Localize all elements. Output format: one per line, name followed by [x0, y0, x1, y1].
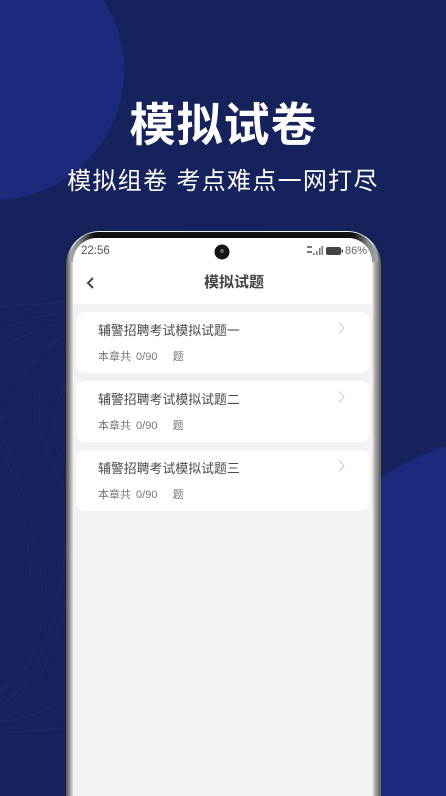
icon: status signal and battery: [307, 246, 343, 255]
icon: camera: [214, 244, 230, 260]
icon: back arrow: [86, 277, 94, 289]
card: test one: [76, 312, 370, 373]
status bar battery percent: 86%: [345, 245, 367, 257]
subtitle: 模拟组卷 考点难点一网打尽: [67, 168, 379, 195]
card: test two: 本章共 0/90 题: [98, 420, 184, 432]
card: test three: 本章共 0/90 题: [98, 489, 184, 501]
screen title: 模拟试题: [204, 274, 264, 291]
app header: [73, 238, 372, 304]
screen: [73, 238, 372, 796]
phone mockup: [66, 231, 381, 796]
card: test three: 辅警招聘考试模拟试题三: [98, 461, 240, 476]
card: test three: [76, 450, 370, 511]
status bar time: 22:56: [81, 245, 110, 257]
card: test two: 辅警招聘考试模拟试题二: [98, 392, 240, 407]
phone top bezel: [69, 232, 378, 262]
title: 模拟试卷: [130, 99, 318, 151]
card: test one: 辅警招聘考试模拟试题一: [98, 323, 240, 338]
card: test one: 本章共 0/90 题: [98, 351, 184, 363]
phone frame: [66, 231, 381, 796]
card: test two: [76, 381, 370, 442]
